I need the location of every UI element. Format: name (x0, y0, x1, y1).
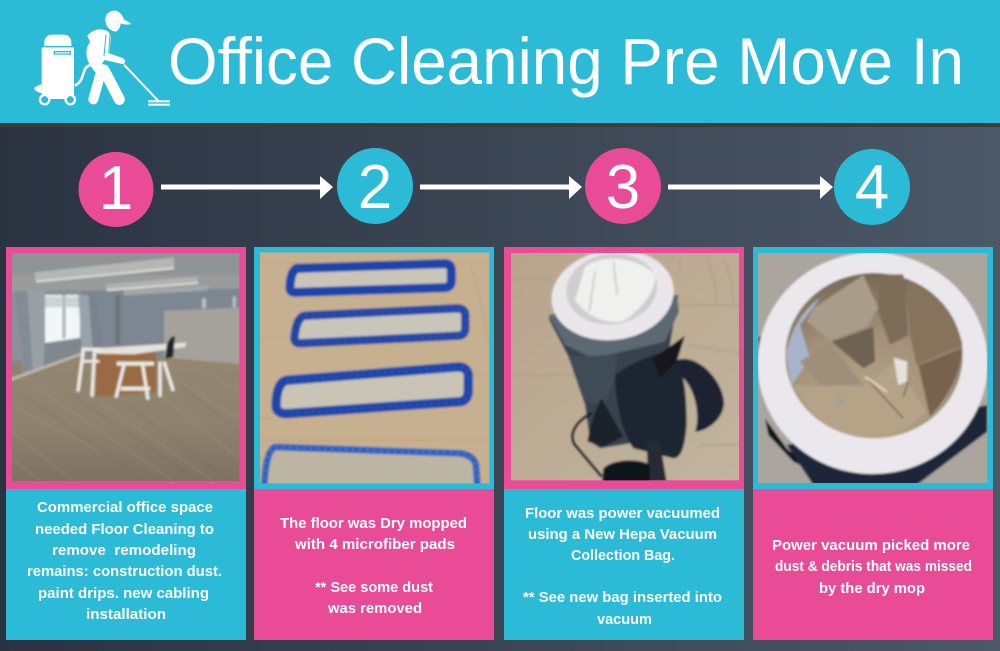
photo frame 1 (6, 247, 246, 489)
caption box 3: using a New Hepa Vacuum (528, 526, 717, 543)
photo frame 4 (753, 247, 993, 489)
caption box 1: installation (86, 606, 166, 623)
caption box 1: paint drips. new cabling (38, 585, 209, 602)
step 3 badge: 3 (606, 153, 640, 222)
caption box 1: needed Floor Cleaning to (35, 521, 214, 538)
arrow 3 to 4 (668, 176, 833, 199)
panel: step 4 (750, 245, 1000, 640)
panel: step 1 (0, 245, 253, 640)
panel: step 2 (250, 245, 503, 640)
caption box 1: Commercial office space (37, 499, 213, 516)
photo frame 3 (504, 247, 744, 489)
photo frame 2 (254, 247, 494, 489)
step 3 badge (585, 148, 661, 224)
caption box 3: ** See new bag inserted into (523, 589, 722, 606)
caption box 3 (504, 489, 744, 640)
photo: backpack vacuum with new bag (511, 253, 739, 480)
caption box 3: Floor was power vacuumed (525, 505, 720, 522)
caption box 2: with 4 microfiber pads (294, 536, 455, 553)
caption box 4: Power vacuum picked more (772, 537, 970, 554)
caption box 1: remains: construction dust. (27, 563, 222, 580)
caption box 4 (753, 489, 993, 640)
step 4 badge (834, 149, 910, 225)
photo: empty office space (12, 253, 240, 481)
icon: cleaner with vacuum and mop (34, 11, 170, 106)
caption box 2: ** See some dust (315, 579, 433, 596)
step 2 badge (337, 148, 413, 224)
arrow 2 to 3 (420, 176, 582, 199)
caption box 2: The floor was Dry mopped (280, 515, 467, 532)
title: Office Cleaning Pre Move In (168, 24, 964, 98)
step 1 badge: 1 (99, 154, 133, 223)
caption box 1: remove remodeling (52, 542, 196, 559)
step 2 badge: 2 (358, 153, 392, 222)
step 1 badge (78, 152, 154, 227)
step 4 badge: 4 (855, 153, 889, 222)
header banner (0, 0, 1000, 127)
caption box 3: vacuum (597, 611, 652, 628)
caption box 4: dust & debris that was missed (775, 558, 972, 575)
panel: step 3 (500, 242, 753, 640)
arrow 1 to 2 (161, 176, 333, 199)
caption box 3: Collection Bag. (571, 547, 675, 564)
caption box 1 (6, 489, 246, 640)
caption box 2: was removed (327, 600, 422, 617)
photo: dust and debris in bag (758, 253, 988, 483)
photo: four microfiber mop pads (260, 252, 490, 484)
caption box 2 (254, 489, 494, 640)
caption box 4: by the dry mop (819, 580, 925, 597)
